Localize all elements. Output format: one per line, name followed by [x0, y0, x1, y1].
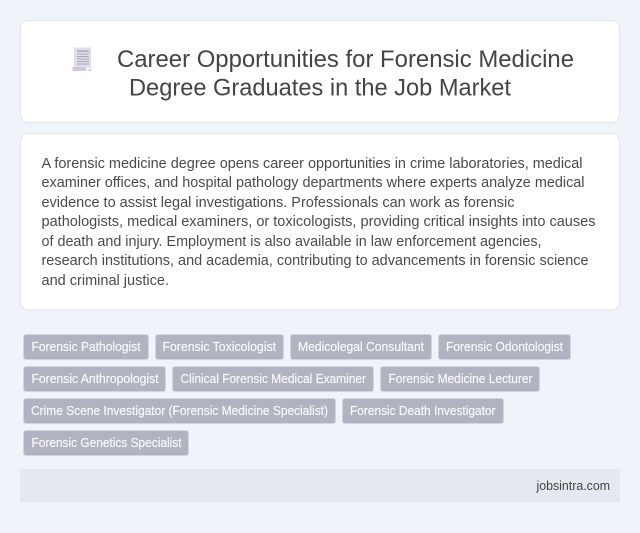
- tag: Forensic Pathologist: Forensic Pathologist: [32, 340, 141, 354]
- tag: Forensic Medicine Lecturer: Forensic Medicine Lecturer: [388, 372, 532, 386]
- tag: Medicolegal Consultant: [290, 334, 432, 360]
- tag: Forensic Odontologist: Forensic Odontologist: [446, 340, 564, 354]
- tag: Forensic Death Investigator: Forensic Death Investigator: [350, 404, 496, 418]
- tag: Forensic Death Investigator: [342, 398, 504, 424]
- footer: source site: jobsintra.com: [536, 479, 610, 493]
- text block: description paragraph: A forensic medicine degree opens career opportunities in crime laboratories, medical: [42, 155, 582, 172]
- tag: Forensic Odontologist: [438, 334, 570, 360]
- text block: description paragraph: examiner offices, and hospital pathology departments where experts analyze medical: [42, 174, 584, 191]
- text block: description paragraph: and criminal justice.: [42, 272, 169, 289]
- title: Career Opportunities for Forensic Medicine: [117, 46, 574, 73]
- tag: Crime Scene Investigator: [24, 398, 336, 424]
- tag: Forensic Pathologist: [24, 334, 148, 360]
- panel: title card: [20, 20, 620, 122]
- tag list: career roles: [24, 334, 570, 456]
- text block: description paragraph: evidence to assist legal investigations. Professionals can work as forensic: [42, 194, 515, 211]
- tag: Forensic Genetics Specialist: Forensic Genetics Specialist: [32, 436, 182, 450]
- text block: description paragraph: of death and injury. Employment is also available in law enforcement agencies,: [42, 233, 542, 250]
- panel: description: [20, 134, 620, 310]
- title: Degree Graduates in the Job Market: [129, 74, 511, 102]
- text block: description paragraph: pathologists, medical examiners, or toxicologists, providing critical insights into causes: [42, 213, 596, 230]
- tag: Crime Scene Investigator: Crime Scene Investigator (Forensic Medicine Specialist): [31, 404, 328, 418]
- title: [117, 46, 574, 102]
- tag: Medicolegal Consultant: Medicolegal Consultant: [298, 340, 424, 354]
- icon: paper scroll document: [72, 48, 91, 71]
- tag: Forensic Toxicologist: [156, 334, 284, 360]
- text block: description paragraph: research institutions, and academia, contributing to advancements in forensic science: [42, 252, 588, 269]
- tag: Forensic Anthropologist: [24, 366, 166, 392]
- tag: Forensic Anthropologist: Forensic Anthropologist: [32, 372, 159, 386]
- tag: Clinical Forensic Medical Examiner: Clinical Forensic Medical Examiner: [180, 372, 366, 386]
- tag: Forensic Toxicologist: Forensic Toxicologist: [162, 340, 277, 354]
- tag: Forensic Medicine Lecturer: [380, 366, 540, 392]
- footer bar: [20, 469, 620, 502]
- tag: Clinical Forensic Medical Examiner: [172, 366, 374, 392]
- text block: description paragraph: [42, 155, 596, 289]
- tag: Forensic Genetics Specialist: [24, 430, 188, 456]
